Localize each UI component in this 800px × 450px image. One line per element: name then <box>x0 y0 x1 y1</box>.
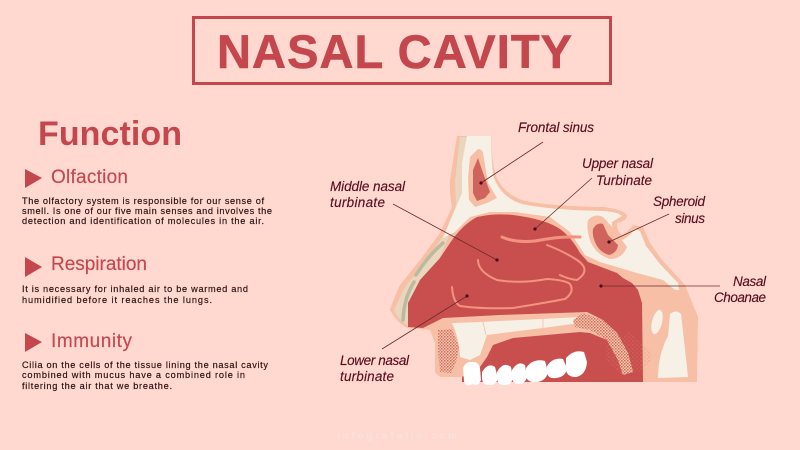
speckled palate bone <box>573 313 633 375</box>
panel: respiration <box>22 254 248 305</box>
pointer: lower nasal turbinate <box>382 294 469 349</box>
text: immunity body: Cilia on the cells of the tissue lining the nasal cavity <box>22 360 268 370</box>
text: immunity body: filtering the air that we breathe. <box>22 381 172 391</box>
label: upper nasal turbinate <box>582 156 654 188</box>
label: middle nasal turbinate <box>330 179 406 210</box>
heading: olfaction: Olfaction <box>51 167 128 188</box>
pointer: middle nasal turbinate <box>393 204 499 262</box>
palate and lip <box>430 312 633 377</box>
heading: function: Function <box>38 115 182 153</box>
icon: arrow olfaction <box>25 169 42 188</box>
green cartilage <box>403 243 443 320</box>
heading: immunity: Immunity <box>51 331 132 352</box>
text: immunity body <box>22 360 268 391</box>
label: nasal choanae: Choanae <box>714 290 766 305</box>
teeth <box>463 351 587 385</box>
label: nasal choanae <box>714 274 767 305</box>
panel: immunity <box>22 331 268 391</box>
text: respiration body: humidified before it reaches the lungs. <box>22 295 212 305</box>
palate bone <box>452 317 580 360</box>
frontal sinus <box>468 149 497 207</box>
cream bone <box>443 136 679 290</box>
pointer: frontal sinus <box>479 142 543 185</box>
icon: arrow respiration <box>25 257 42 277</box>
skin and tissue outline <box>390 136 698 382</box>
heading: respiration: Respiration <box>51 254 147 275</box>
label: spheroid sinus <box>653 194 705 226</box>
label: nasal choanae: Nasal <box>733 274 767 289</box>
text: olfaction body <box>22 196 272 226</box>
label: lower nasal turbinate: turbinate <box>340 369 394 384</box>
text: respiration body: It is necessary for inhaled air to be warmed and <box>22 284 248 294</box>
throat cream bones <box>649 309 665 335</box>
pointer: upper nasal turbinate <box>533 178 592 231</box>
nasal cavity red <box>408 214 643 382</box>
speckled soft tissue <box>606 332 652 374</box>
watermark: infografolio.com <box>337 431 457 442</box>
label: frontal sinus: Frontal sinus <box>518 120 594 135</box>
pointer: spheroid sinus <box>607 214 669 244</box>
title: NASAL CAVITY <box>217 25 572 78</box>
label: spheroid sinus: Spheroid <box>653 194 705 209</box>
text: immunity body: combined with mucus have a combined role in <box>22 370 245 380</box>
panel: olfaction <box>22 167 272 226</box>
diagram: nasal cavity anatomy <box>382 136 720 385</box>
label: spheroid sinus: sinus <box>675 211 705 226</box>
label: middle nasal turbinate: Middle nasal <box>330 179 406 194</box>
text: olfaction body: smell. Is one of our five main senses and involves the <box>22 206 272 216</box>
palate seams <box>483 319 543 335</box>
label: lower nasal turbinate: Lower nasal <box>340 353 410 368</box>
label: upper nasal turbinate: Upper nasal <box>582 156 654 171</box>
tan cartilage strip <box>394 137 468 326</box>
title <box>194 18 610 84</box>
label: lower nasal turbinate <box>340 353 410 384</box>
spheroid sinus <box>587 216 627 259</box>
speckled front bone <box>438 329 459 373</box>
icon: arrow immunity <box>25 333 42 352</box>
label: middle nasal turbinate: turbinate <box>330 195 385 210</box>
turbinates <box>452 237 584 308</box>
text: olfaction body: detection and identification of molecules in the air. <box>22 216 264 226</box>
text: respiration body <box>22 284 248 305</box>
pointer: nasal choanae <box>599 284 720 288</box>
label: upper nasal turbinate: Turbinate <box>596 173 652 188</box>
text: olfaction body: The olfactory system is responsible for our sense of <box>22 196 264 206</box>
